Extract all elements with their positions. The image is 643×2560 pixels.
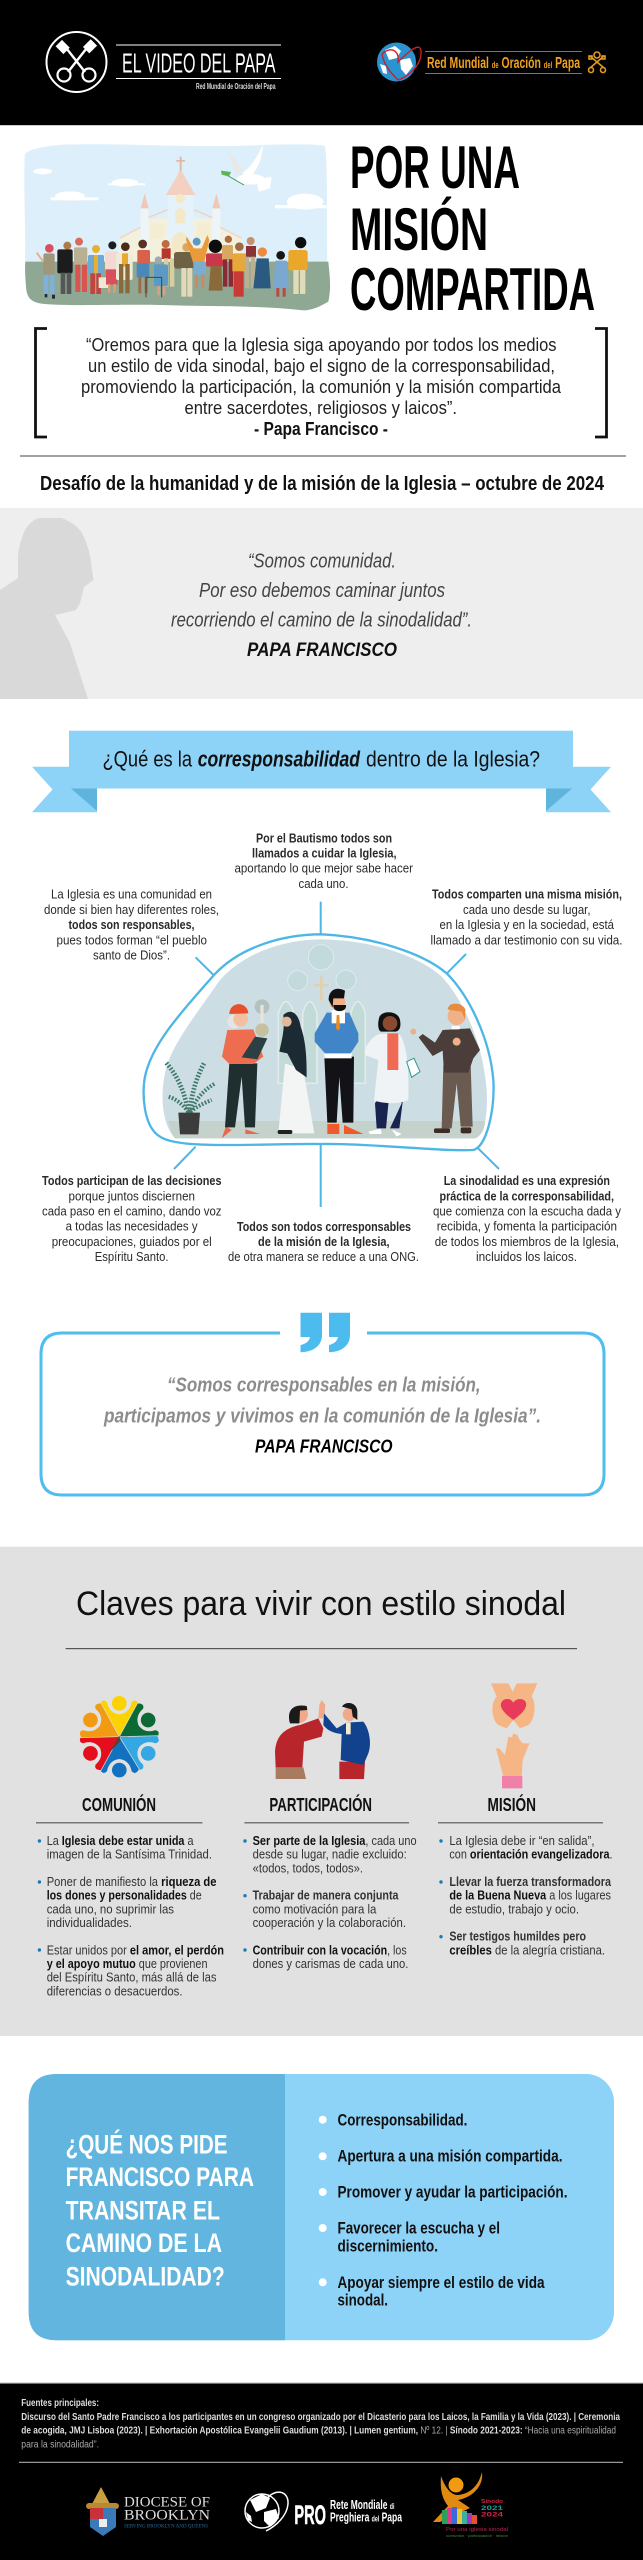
- text: decisions: a todas las necesidades y: [66, 1219, 198, 1234]
- column: participación: desde su lugar, nadie excluido:: [253, 1848, 407, 1862]
- answers list: Corresponsabilidad.: [338, 2110, 467, 2129]
- logo title: Red Mundial de Oración del Papa: Red Mundial de Oración del Papa: [427, 55, 580, 72]
- column: participación: Contribuir con la vocación, los: [253, 1943, 407, 1957]
- text: community: todos son responsables,: [68, 917, 194, 932]
- icon: crossed keys logo: [46, 32, 106, 92]
- connector lines: [174, 902, 499, 1207]
- column: misión: Llevar la fuerza transformadora: [449, 1875, 612, 1889]
- sources: de acogida, JMJ Lisboa (2023). | Exhortación Apostólica Evangelii Gaudium (2013). | Lumen gentium, Nº 12. | Sínodo 2021-2023: “Hacia una espiritualidad: [21, 2425, 616, 2437]
- footer: [0, 2382, 643, 2560]
- prayer intention quote: [36, 328, 606, 439]
- text: baptism: cada uno.: [298, 876, 348, 891]
- sources: para la sinodalidad”.: [21, 2438, 99, 2450]
- text: co-responsible: [228, 1219, 419, 1264]
- icon: high five: [275, 1700, 370, 1779]
- callout: quote box: “Somos corresponsables en la misión,: [167, 1375, 481, 1397]
- illustration: people of the church in blob: [144, 934, 494, 1150]
- column: participación: [243, 1794, 417, 1971]
- answers list: Apoyar siempre el estilo de vida: [338, 2273, 545, 2292]
- prayer intention quote: - Papa Francisco -: [254, 419, 388, 439]
- column: participación: Trabajar de manera conjunta: [253, 1889, 399, 1903]
- logo: Diocese of Brooklyn: BROOKLYN: [124, 2507, 210, 2523]
- column: comunión: individualidades.: [47, 1916, 132, 1930]
- priest: [410, 1004, 480, 1133]
- clouds: [33, 168, 327, 210]
- worker: [222, 1004, 267, 1138]
- answers list: sinodal.: [338, 2291, 388, 2310]
- people: [37, 235, 308, 299]
- answers list: Apertura a una misión compartida.: [338, 2147, 562, 2166]
- logo: Synod 2021-2024: 2021: [481, 2506, 504, 2512]
- logo: Diocese of Brooklyn: SERVING BROOKLYN AND QUEENS: [124, 2523, 208, 2529]
- heading banner: corresponsabilidad: ¿Qué es la: [102, 747, 193, 772]
- text: community: santo de Dios”.: [93, 947, 170, 962]
- text: decisions: [42, 1173, 222, 1264]
- heading banner: corresponsabilidad: dentro de la Iglesia?: [366, 747, 540, 772]
- text: community: pues todos forman “el pueblo: [56, 932, 207, 947]
- column: misión: de estudio, trabajo y ocio.: [449, 1902, 579, 1916]
- icon: communion circle of people: [74, 1696, 165, 1777]
- column: misión: creíbles de la alegría cristiana.: [449, 1943, 605, 1957]
- text: baptism: llamados a cuidar la Iglesia,: [252, 845, 396, 860]
- panel: Pope Francis quote: PAPA FRANCISCO: [247, 640, 397, 661]
- panel: what Francis asks: [29, 2074, 614, 2340]
- text: synodality: recibida, y fomenta la participación: [437, 1219, 617, 1234]
- header band: [0, 0, 643, 126]
- column: comunión: del Espíritu Santo, más allá de las: [47, 1971, 217, 1985]
- text: decisions: preocupaciones, guiados por el: [52, 1234, 212, 1249]
- logo: Synod 2021-2024: Por una iglesia sinodal: [446, 2527, 508, 2533]
- text: synodality: La sinodalidad es una expresión: [444, 1173, 610, 1188]
- logo: Synod 2021-2024: comunión · participación · misión: [446, 2534, 508, 2538]
- column: participación: dones y carismas de cada uno.: [253, 1957, 408, 1971]
- column: participación: Ser parte de la Iglesia, cada uno: [253, 1834, 417, 1848]
- column: misión: de la Buena Nueva a los lugares: [449, 1889, 611, 1903]
- heading banner: corresponsabilidad: [32, 731, 611, 812]
- column: misión: con orientación evangelizadora.: [449, 1848, 612, 1862]
- man with blue sweater: [315, 989, 363, 1134]
- column: misión: MISIÓN: [488, 1794, 536, 1815]
- icon: hands with heart: [491, 1683, 537, 1788]
- logo title: El video del Papa: EL VIDEO DEL PAPA: [122, 48, 276, 78]
- icon: quotation marks: [300, 1313, 350, 1352]
- logo: Rete Mondiale di Preghiera del Papa: PRO: [294, 2500, 326, 2530]
- title: POR UNA: [350, 134, 520, 201]
- church windows: [255, 945, 365, 1083]
- text: shared mission: llamado a dar testimonio con su vida.: [430, 932, 622, 947]
- logo: Diocese of Brooklyn: DIOCESE OF: [124, 2495, 210, 2511]
- text: community: [44, 887, 219, 962]
- column: participación: «todos, todos, todos».: [253, 1861, 363, 1875]
- callout: quote box: participamos y vivimos en la comunión de la Iglesia”.: [103, 1405, 541, 1427]
- panel: keys for synodal style: [0, 1547, 643, 2036]
- icon: globe with heart: [377, 42, 421, 82]
- illustration: community in front of church: [24, 144, 330, 310]
- text: decisions: porque juntos disciernen: [68, 1188, 195, 1203]
- heading banner: corresponsabilidad: corresponsabilidad: [198, 747, 360, 772]
- title: MISIÓN: [350, 196, 488, 263]
- question: ¿QUÉ NOS PIDE: [66, 2129, 228, 2159]
- column: comunión: y el apoyo mutuo que provienen: [47, 1957, 208, 1971]
- doctor: [365, 1012, 420, 1137]
- panel: Pope Francis quote: Por eso debemos caminar juntos: [199, 580, 445, 602]
- column: comunión: Poner de manifiesto la riqueza de: [47, 1875, 217, 1889]
- logo title: El video del Papa: Red Mundial de Oración del Papa: [196, 82, 276, 91]
- callout: quote box: [41, 1313, 604, 1495]
- text: synodality: de todos los miembros de la Iglesia,: [435, 1234, 619, 1249]
- column: misión: La Iglesia debe ir “en salida”,: [449, 1834, 594, 1848]
- text: baptism: aportando lo que mejor sabe hacer: [234, 861, 414, 876]
- logo: Rete Mondiale di Preghiera del Papa: Preghiera del Papa: [330, 2510, 403, 2525]
- column: comunión: COMUNIÓN: [82, 1794, 156, 1815]
- text: community: donde si bien hay diferentes roles,: [44, 902, 219, 917]
- text: community: La Iglesia es una comunidad en: [51, 887, 212, 902]
- column: misión: Ser testigos humildes pero: [449, 1930, 586, 1944]
- column: comunión: [36, 1794, 224, 1998]
- logo title: El video del Papa: [116, 44, 281, 91]
- text: decisions: cada paso en el camino, dando voz: [42, 1204, 222, 1219]
- column: participación: PARTICIPACIÓN: [269, 1794, 372, 1815]
- column: comunión: Estar unidos por el amor, el perdón: [47, 1943, 224, 1957]
- question: FRANCISCO PARA: [66, 2162, 254, 2192]
- answers list: Favorecer la escucha y el: [338, 2219, 500, 2238]
- answers list: [319, 2110, 568, 2310]
- column: comunión: imagen de la Santísima Trinidad.: [47, 1848, 212, 1862]
- panel: Pope Francis quote: [0, 508, 643, 699]
- callout: quote box: PAPA FRANCISCO: [255, 1437, 392, 1457]
- text: synodality: [433, 1173, 621, 1264]
- panel: Pope Francis quote: recorriendo el camino de la sinodalidad”.: [171, 610, 472, 632]
- text: co-responsible: de la misión de la Iglesia,: [258, 1234, 390, 1249]
- question: CAMINO DE LA: [66, 2228, 222, 2258]
- dove: [221, 145, 272, 192]
- church: [119, 157, 242, 262]
- logo: Synod 2021-2024: Sínodo: [481, 2499, 504, 2505]
- column: misión: [438, 1794, 612, 1957]
- panel: Pope Francis quote: “Somos comunidad.: [248, 551, 396, 573]
- plant: [166, 1063, 215, 1134]
- title: [350, 134, 595, 323]
- logo: Rete Mondiale di Preghiera del Papa: Rete Mondiale di: [330, 2497, 394, 2512]
- column: participación: cooperación y la colaboración.: [253, 1916, 406, 1930]
- answers list: discernimiento.: [338, 2237, 438, 2256]
- icon: pope silhouette: [0, 518, 94, 699]
- logo: Synod 2021-2024: [433, 2472, 508, 2538]
- logo: Diocese of Brooklyn: [86, 2487, 210, 2536]
- logo: Synod 2021-2024: 2024: [481, 2512, 504, 2518]
- text: baptism: [234, 830, 414, 891]
- question: [66, 2129, 254, 2291]
- text: co-responsible: Todos son todos corresponsables: [237, 1219, 411, 1234]
- text: decisions: Todos participan de las decisiones: [42, 1173, 222, 1188]
- column: comunión: La Iglesia debe estar unida a: [47, 1834, 194, 1848]
- column: comunión: diferencias o desacuerdos.: [47, 1984, 183, 1998]
- column: comunión: cada uno, no suprimir las: [47, 1902, 174, 1916]
- icon: vatican emblem: [588, 52, 606, 72]
- question: TRANSITAR EL: [66, 2195, 220, 2225]
- text: shared mission: [430, 887, 622, 947]
- text: shared mission: en la Iglesia y en la sociedad, está: [440, 917, 615, 932]
- text: co-responsible: de otra manera se reduce a una ONG.: [228, 1249, 419, 1264]
- sources: [21, 2397, 620, 2450]
- prayer intention quote: entre sacerdotes, religiosos y laicos”.: [184, 398, 457, 418]
- text: baptism: Por el Bautismo todos son: [256, 830, 392, 845]
- column: participación: como motivación para la: [253, 1902, 376, 1916]
- sources: Fuentes principales:: [21, 2397, 99, 2409]
- nun: [278, 1012, 314, 1134]
- text: decisions: Espíritu Santo.: [95, 1249, 168, 1264]
- answers list: Promover y ayudar la participación.: [338, 2183, 568, 2202]
- text: synodality: incluidos los laicos.: [476, 1249, 577, 1264]
- prayer intention quote: promoviendo la participación, la comunión y la misión compartida: [81, 377, 562, 397]
- text: synodality: que comienza con la escucha dada y: [433, 1204, 621, 1219]
- prayer intention quote: “Oremos para que la Iglesia siga apoyando por todos los medios: [86, 335, 556, 355]
- text: shared mission: cada uno desde su lugar,: [463, 902, 590, 917]
- column: comunión: los dones y personalidades de: [47, 1889, 202, 1903]
- heading: Claves para vivir con estilo sinodal: [76, 1585, 566, 1623]
- prayer intention quote: un estilo de vida sinodal, bajo el signo de la corresponsabilidad,: [88, 356, 555, 376]
- logo: Rete Mondiale di Preghiera del Papa: [245, 2492, 403, 2531]
- question: SINODALIDAD?: [66, 2261, 225, 2291]
